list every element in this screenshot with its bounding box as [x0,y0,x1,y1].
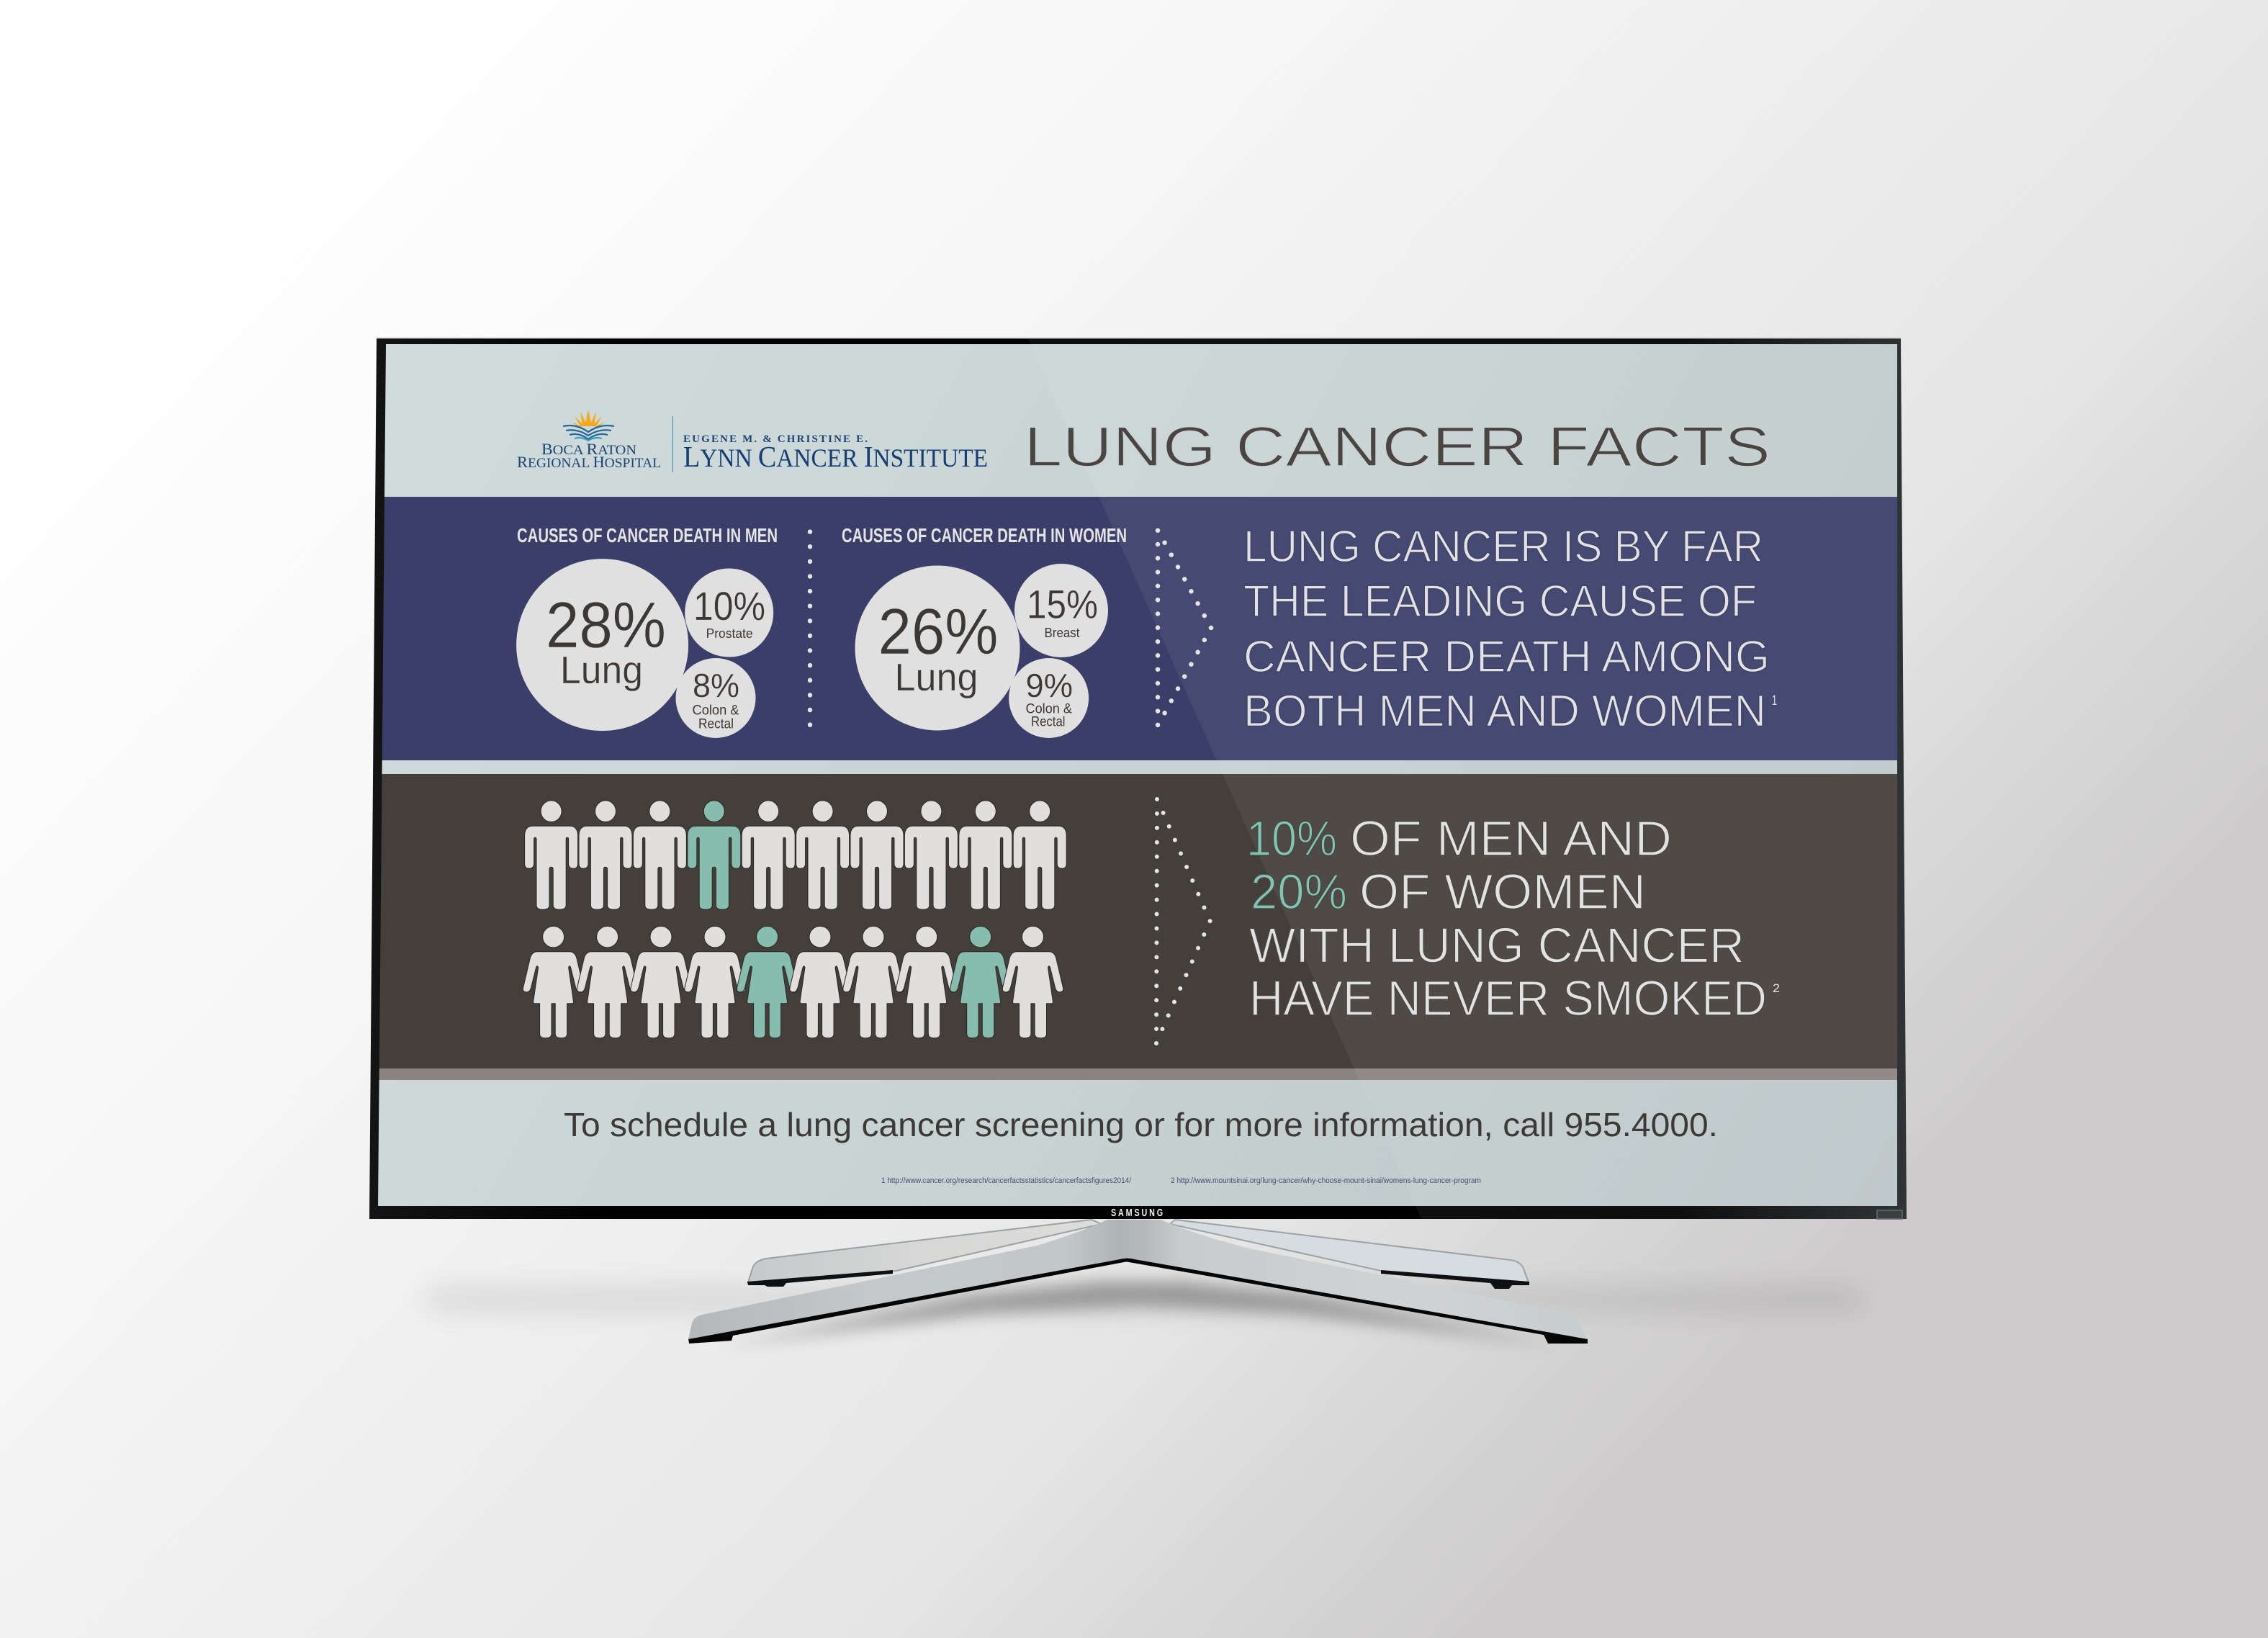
heading: men: CAUSES OF CANCER DEATH IN MEN [517,524,778,546]
circle: lung 28%: 28% [546,590,666,662]
circle: colon and rectal 9%: 9% [1025,667,1073,704]
text block: never smoked: OF MEN AND [1350,811,1672,866]
circle: colon and rectal 8% [675,658,756,738]
circle: colon and rectal 9%: Rectal [1031,715,1066,730]
circle: prostate 10%: 10% [693,583,765,629]
logo text: Boca Raton: BOCA RATON [541,440,636,458]
panel: light gap [382,760,1897,774]
footnote 1: 1 http://www.cancer.org/research/cancerfactsstatistics/cancerfactsfigures2014/ [881,1176,1132,1185]
panel: header background [384,344,1897,497]
panel: dark non-smoker band [379,774,1897,1068]
logo text: Lynn Cancer Institute: LYNN CANCER INSTITUTE [683,440,988,473]
circle: lung 28%: Lung [560,649,643,692]
logo: Boca Raton Regional Hospital [517,410,988,473]
text block: never smoked: 2 [1773,981,1780,995]
panel: footer background [378,1080,1897,1206]
circle: colon and rectal 8%: Colon & [693,703,739,719]
title: LUNG CANCER FACTS [1024,415,1770,478]
screen glare [1028,338,1907,1219]
logo divider [672,416,673,472]
text block: lung cancer leading cause: 1 [1772,693,1777,708]
panel: grey strip [379,1068,1897,1080]
floor shadow [425,1282,1865,1346]
text block: never smoked: 20% [1251,864,1347,919]
text block: lung cancer leading cause [1243,522,1777,737]
divider: dotted line between charts [808,532,812,725]
chart: women causes of death [855,564,1108,738]
text block: lung cancer leading cause: LUNG CANCER IS BY FAR [1243,522,1763,572]
stand: front legs [688,1220,1588,1344]
pictogram: men row, 1 in 10 highlighted [525,801,1066,909]
circle: lung 26%: Lung [894,656,978,699]
stand: rear left leg [747,1220,1102,1287]
pictogram: women row, 2 in 10 highlighted [523,926,1063,1038]
logo text: donors: EUGENE M. & CHRISTINE E. [683,433,868,445]
text block: never smoked: 10% [1246,811,1337,866]
circle: colon and rectal 9% [1009,658,1089,738]
circle: breast 15% [1014,564,1108,657]
circle: colon and rectal 9%: Colon & [1025,701,1072,717]
panel: blue statistics band [382,497,1897,760]
circle: breast 15%: 15% [1027,582,1098,626]
frame button [1877,1210,1902,1219]
text block: never smoked: HAVE NEVER SMOKED [1249,971,1767,1026]
chart: men causes of death [516,559,773,738]
text block: lung cancer leading cause: CANCER DEATH AMONG [1243,632,1770,682]
call to action: To schedule a lung cancer screening or for more information, call 955.4000. [564,1106,1718,1143]
text block: lung cancer leading cause: THE LEADING CAUSE OF [1243,577,1757,626]
arrow: dotted chevron, dark band [1156,799,1210,1044]
text block: never smoked: WITH LUNG CANCER [1249,918,1745,973]
circle: breast 15%: Breast [1044,626,1080,640]
television frame [369,338,1907,1219]
circle: lung 26% [855,566,1020,730]
circle: prostate 10%: Prostate [706,626,753,641]
television stand [688,1220,1588,1344]
circle: lung 26%: 26% [878,596,998,668]
icon: sun and waves [563,410,614,441]
circle: lung 28% [516,559,688,731]
text block: lung cancer leading cause: BOTH MEN AND WOMEN [1243,687,1766,737]
screen panels [378,344,1897,1206]
arrow: dotted chevron, blue band [1158,531,1211,725]
text block: never smoked: OF WOMEN [1359,864,1646,919]
circle: colon and rectal 8%: 8% [693,667,739,704]
stand: rear right leg [1170,1220,1529,1289]
circle: prostate 10% [685,569,773,657]
heading: women: CAUSES OF CANCER DEATH IN WOMEN [842,524,1127,546]
text block: never smoked [1246,811,1780,1026]
footnote 2: 2 http://www.mountsinai.org/lung-cancer/why-choose-mount-sinai/womens-lung-cancer-program [1171,1176,1481,1185]
brand: Samsung: SAMSUNG [1111,1207,1165,1219]
circle: colon and rectal 8%: Rectal [698,717,734,732]
logo text: Regional Hospital: REGIONAL HOSPITAL [517,453,661,471]
